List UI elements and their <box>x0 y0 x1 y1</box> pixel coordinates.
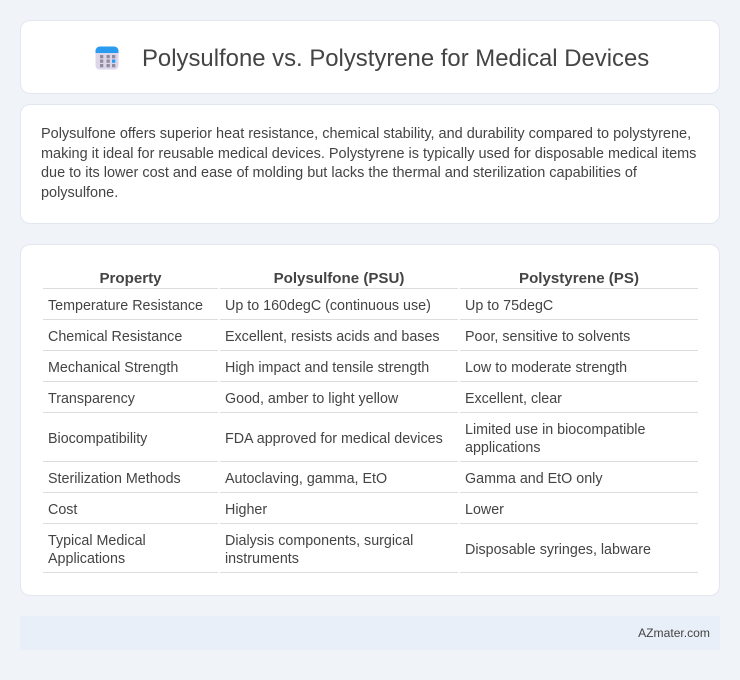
comparison table: Disposable syringes, labware <box>465 542 651 558</box>
comparison table: Typical Medical Applications <box>48 532 146 566</box>
intro text: polysulfone. <box>41 184 118 200</box>
comparison table: Chemical Resistance <box>48 328 182 344</box>
comparison table: Transparency <box>48 390 135 406</box>
comparison table: Sterilization Methods <box>48 470 181 486</box>
comparison table: Polystyrene (PS) <box>519 270 639 287</box>
footer <box>20 616 720 650</box>
intro text <box>41 126 696 200</box>
comparison table: Up to 75degC <box>465 298 553 314</box>
title: Polysulfone vs. Polystyrene for Medical Devices <box>142 45 649 72</box>
comparison table: Gamma and EtO only <box>465 470 602 486</box>
table panel <box>20 244 720 596</box>
comparison table: Up to 160degC (continuous use) <box>225 298 431 314</box>
icon: calendar <box>96 46 118 70</box>
comparison table: Higher <box>225 502 267 518</box>
comparison table: Property <box>99 270 162 287</box>
comparison table: Mechanical Strength <box>48 360 178 376</box>
comparison table: High impact and tensile strength <box>225 360 429 376</box>
comparison table: Lower <box>465 502 504 518</box>
intro text: making it ideal for reusable medical devices. Polystyrene is typically used for disposable medical items <box>41 146 696 162</box>
intro text: due to its lower cost and ease of molding but lacks the thermal and sterilization capabilities of <box>41 165 637 181</box>
comparison table: Limited use in biocompatible applications <box>465 422 645 456</box>
comparison table: Excellent, clear <box>465 390 562 406</box>
comparison table: Excellent, resists acids and bases <box>225 328 440 344</box>
comparison table: Cost <box>48 502 77 518</box>
comparison table: Good, amber to light yellow <box>225 390 398 406</box>
comparison table: Low to moderate strength <box>465 360 627 376</box>
comparison table: Temperature Resistance <box>48 298 203 314</box>
comparison table: Autoclaving, gamma, EtO <box>225 470 387 486</box>
footer: AZmater.com <box>638 626 710 640</box>
intro text: Polysulfone offers superior heat resistance, chemical stability, and durability compared to polystyrene, <box>41 126 691 142</box>
comparison table: Dialysis components, surgical instruments <box>225 532 413 566</box>
comparison table <box>43 270 698 573</box>
intro panel <box>20 104 720 224</box>
comparison table: FDA approved for medical devices <box>225 430 443 446</box>
comparison table: Biocompatibility <box>48 430 147 446</box>
header panel <box>20 20 720 94</box>
comparison table: Polysulfone (PSU) <box>274 270 404 287</box>
comparison table: Poor, sensitive to solvents <box>465 328 630 344</box>
